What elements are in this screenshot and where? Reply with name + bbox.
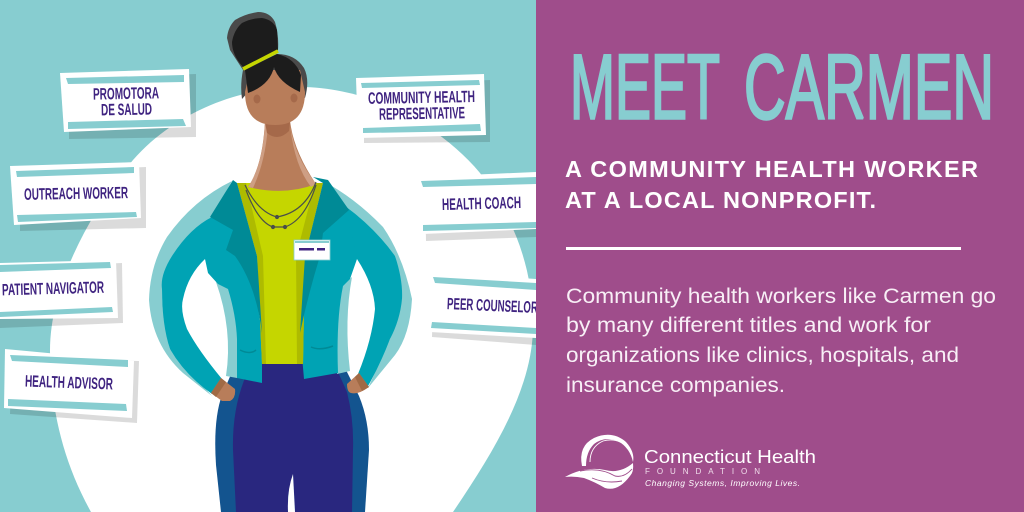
card: outreach worker: OUTREACH WORKER: [24, 184, 128, 204]
hair front: [245, 54, 301, 93]
pockets: [240, 346, 333, 352]
logo foundation: FOUNDATION: [645, 467, 760, 476]
left hand: [211, 378, 235, 401]
purple background: [536, 0, 1024, 512]
body text: organizations like clinics, hospitals, and: [566, 344, 959, 367]
head: [245, 70, 305, 125]
card: promotora de salud: DE SALUD: [101, 101, 152, 119]
card: community health representative: [356, 74, 490, 143]
body text: by many different titles and work for: [566, 314, 931, 337]
left sleeve: [162, 218, 222, 394]
necklace: [245, 182, 316, 228]
card: health coach: [420, 172, 536, 241]
divider: [566, 247, 961, 250]
subtitle: A COMMUNITY HEALTH WORKER: [565, 156, 978, 182]
card: outreach worker: [10, 162, 146, 231]
panel: illustration: [0, 0, 538, 512]
card: community health representative: REPRESENTATIVE: [379, 104, 465, 124]
jacket right torso: [302, 248, 357, 379]
card: health coach: HEALTH COACH: [442, 194, 521, 214]
card: promotora de salud: PROMOTORA: [93, 84, 159, 104]
title: [570, 37, 994, 139]
body text: insurance companies.: [566, 374, 785, 397]
hair bun outer: [227, 12, 278, 70]
teal background: [0, 0, 536, 512]
card: patient navigator: PATIENT NAVIGATOR: [2, 279, 104, 299]
hair band: [243, 51, 278, 69]
card: community health representative: COMMUNITY HEALTH: [368, 88, 475, 108]
logo name: Connecticut Health: [644, 447, 816, 467]
lapel right: [300, 177, 349, 333]
hair bun: [232, 18, 278, 67]
card: health advisor: [4, 349, 139, 423]
shirt: [237, 183, 323, 364]
logo mark: [565, 435, 633, 489]
body text: [566, 285, 996, 397]
name badge: [294, 240, 330, 260]
chin shadow: [265, 122, 290, 137]
lapel left: [210, 180, 262, 333]
neck highlight: [248, 122, 316, 188]
jacket left torso: [205, 217, 262, 383]
card: peer counselor: PEER COUNSELOR: [447, 295, 538, 317]
light lining right: [337, 277, 352, 374]
white oval backdrop: [50, 87, 533, 512]
neck: [248, 120, 316, 191]
panel: text: [536, 0, 1024, 512]
light lining left: [216, 282, 237, 378]
figure: Carmen: [149, 12, 412, 512]
title: MEET: [570, 37, 720, 139]
subtitle: [565, 156, 978, 213]
cheeks: [254, 94, 298, 104]
card: peer counselor: [430, 272, 538, 345]
trousers: [215, 362, 369, 512]
card: health advisor: HEALTH ADVISOR: [25, 372, 113, 394]
right sleeve: [346, 208, 402, 386]
body text: Community health workers like Carmen go: [566, 285, 996, 308]
logo tagline: Changing Systems, Improving Lives.: [645, 478, 800, 488]
shirt shading: [237, 183, 323, 364]
right sleeve light edge: [332, 186, 412, 388]
subtitle: AT A LOCAL NONPROFIT.: [565, 187, 876, 213]
logo: [565, 435, 816, 489]
card: patient navigator: [0, 260, 123, 328]
back hair: [241, 54, 307, 99]
right hand: [347, 373, 369, 393]
left sleeve light edge: [149, 181, 232, 396]
card: promotora de salud: [60, 69, 196, 139]
